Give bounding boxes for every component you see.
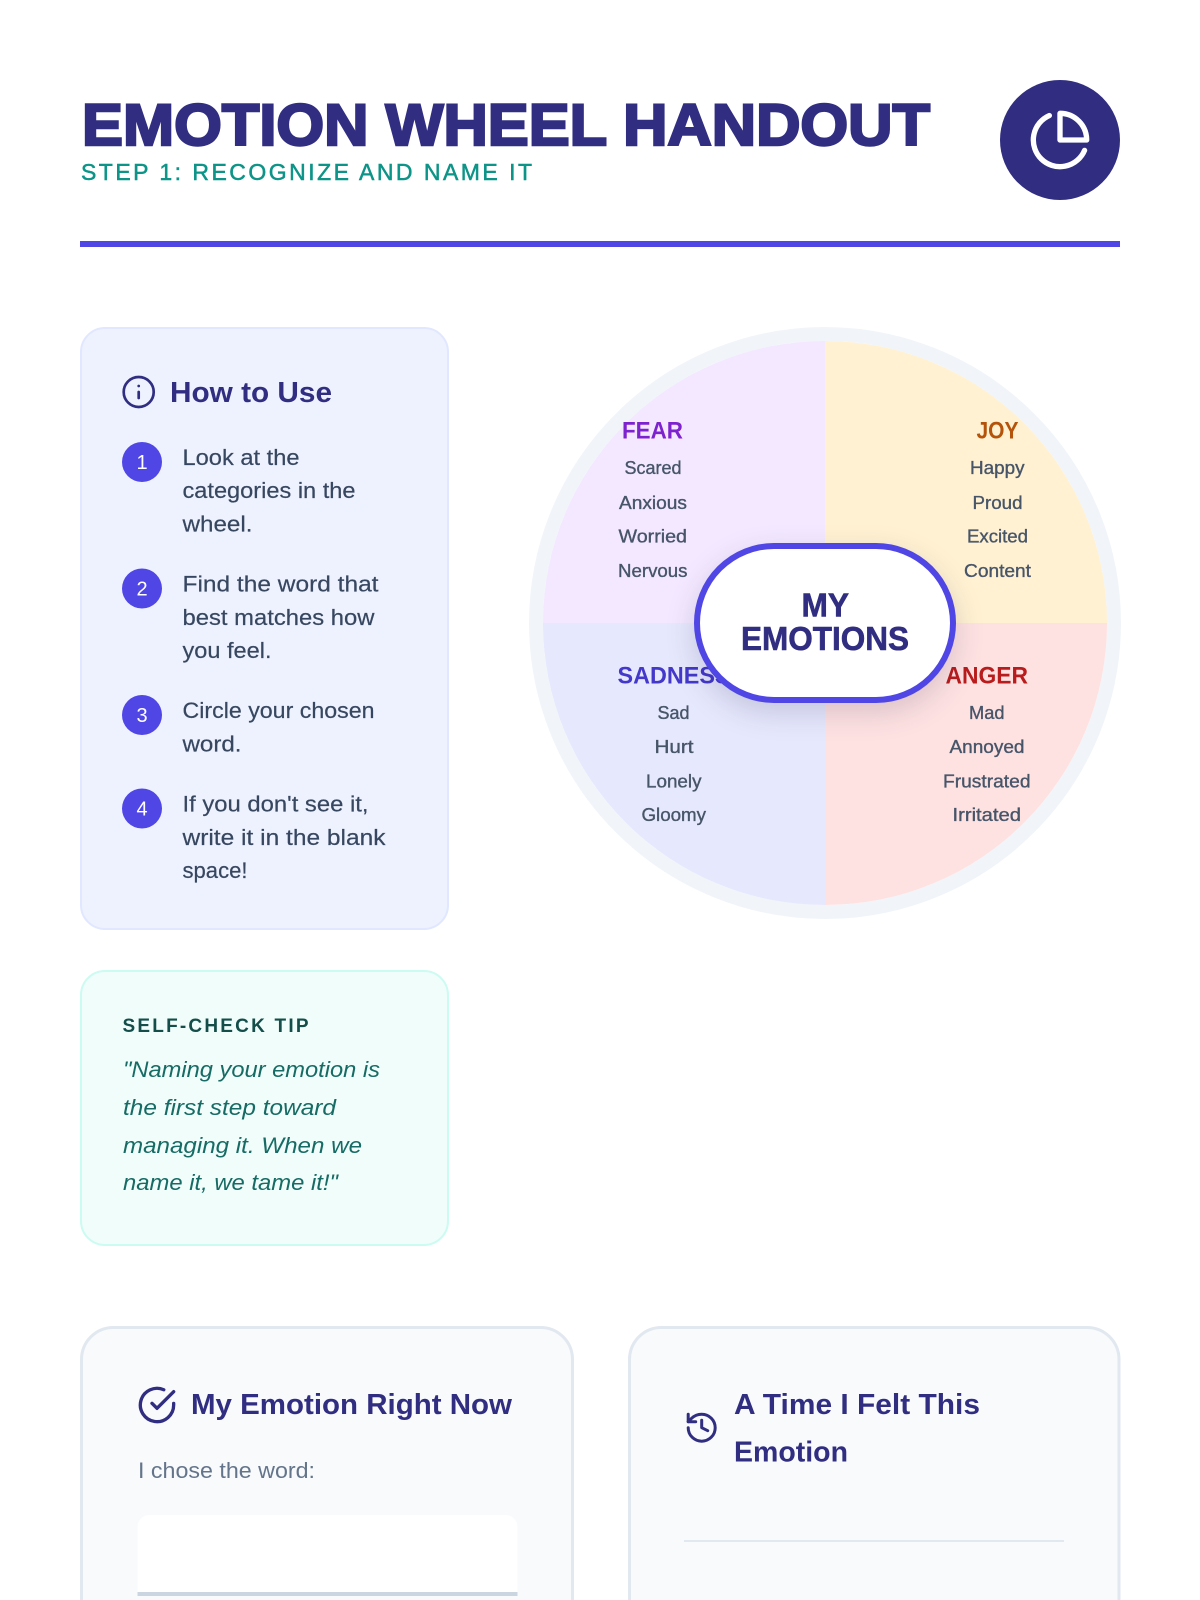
- wedge: joy: Proud: [972, 493, 1022, 513]
- step 1: wheel.: [181, 512, 252, 536]
- card heading: A Time I Felt This: [734, 1389, 980, 1421]
- wedge: joy: Happy: [970, 458, 1024, 478]
- card heading: [734, 1389, 980, 1468]
- wedge: fear: Scared: [624, 458, 682, 478]
- tip quote: [123, 1057, 380, 1195]
- wedge: joy: Content: [964, 561, 1031, 581]
- wedge: sadness: [543, 623, 825, 905]
- tip quote: "Naming your emotion is: [123, 1057, 380, 1082]
- wedge: anger: Frustrated: [943, 772, 1030, 792]
- prompt: I chose the word:: [138, 1458, 315, 1483]
- header: [81, 80, 1120, 200]
- wedge: sadness: Lonely: [646, 772, 702, 792]
- wedge: joy: [825, 341, 1107, 623]
- wedge: sadness: Sad: [658, 703, 690, 723]
- subtitle: STEP 1: RECOGNIZE AND NAME IT: [81, 159, 532, 185]
- card heading: My Emotion Right Now: [191, 1389, 512, 1421]
- wedge: fear: Anxious: [619, 493, 687, 513]
- wedge: joy: Excited: [967, 526, 1028, 546]
- wedge: anger: Annoyed: [950, 737, 1024, 757]
- wedge: anger: Mad: [969, 703, 1004, 723]
- step 4: 4: [136, 798, 148, 820]
- chart: emotion wheel: [536, 334, 1114, 912]
- step 1: 1: [136, 452, 148, 474]
- panel: a time i felt this emotion: [630, 1328, 1119, 1600]
- panel: how to use: [81, 328, 448, 929]
- center hub: my emotions: EMOTIONS: [741, 620, 909, 657]
- step 3: 3: [136, 705, 148, 727]
- center hub: my emotions: [697, 546, 953, 700]
- step 1: [122, 442, 356, 536]
- wedge: fear: FEAR: [622, 418, 683, 444]
- step 2: 2: [136, 578, 148, 600]
- step 2: best matches how: [182, 605, 375, 630]
- wedge: sadness: SADNESS: [618, 662, 730, 690]
- step 3: word.: [181, 732, 242, 756]
- icon: history: [688, 1414, 715, 1441]
- wedge: sadness: Hurt: [654, 737, 694, 757]
- wedge: anger: [825, 623, 1107, 905]
- wedge: anger: Irritated: [952, 805, 1021, 825]
- step 4: If you don't see it,: [182, 792, 368, 816]
- step 3: Circle your chosen: [182, 698, 374, 723]
- tip quote: the first step toward: [123, 1095, 337, 1120]
- wedge: joy: JOY: [976, 418, 1018, 444]
- panel: self-check tip: [81, 971, 448, 1245]
- step 3: [122, 695, 374, 756]
- wedge: anger: ANGER: [946, 662, 1028, 690]
- step 1: Look at the: [182, 445, 300, 470]
- wedge: fear: Nervous: [618, 561, 688, 581]
- step 2: you feel.: [182, 638, 272, 663]
- icon: pie chart badge: [1000, 80, 1120, 200]
- tip heading: SELF-CHECK TIP: [122, 1016, 309, 1037]
- tip quote: name it, we tame it!": [123, 1170, 339, 1195]
- step 4: [122, 788, 387, 883]
- tip quote: managing it. When we: [123, 1133, 362, 1158]
- card heading: Emotion: [734, 1436, 848, 1468]
- wedge: fear: [543, 341, 825, 623]
- step 2: Find the word that: [182, 572, 378, 596]
- center hub: my emotions: MY: [802, 586, 849, 624]
- step 4: write it in the blank: [181, 825, 387, 850]
- icon: check circle: [140, 1388, 174, 1422]
- panel: my emotion right now: [82, 1328, 572, 1600]
- wedge: sadness: Gloomy: [642, 805, 706, 825]
- step 2: [122, 568, 378, 663]
- answer field: [138, 1515, 518, 1596]
- panel heading: How to Use: [170, 377, 332, 409]
- title: EMOTION WHEEL HANDOUT: [82, 93, 930, 158]
- step 4: space!: [182, 858, 248, 883]
- icon: info: [124, 377, 154, 407]
- writing line: [684, 1540, 1064, 1542]
- wedge: fear: Worried: [618, 526, 687, 546]
- step 1: categories in the: [182, 478, 356, 503]
